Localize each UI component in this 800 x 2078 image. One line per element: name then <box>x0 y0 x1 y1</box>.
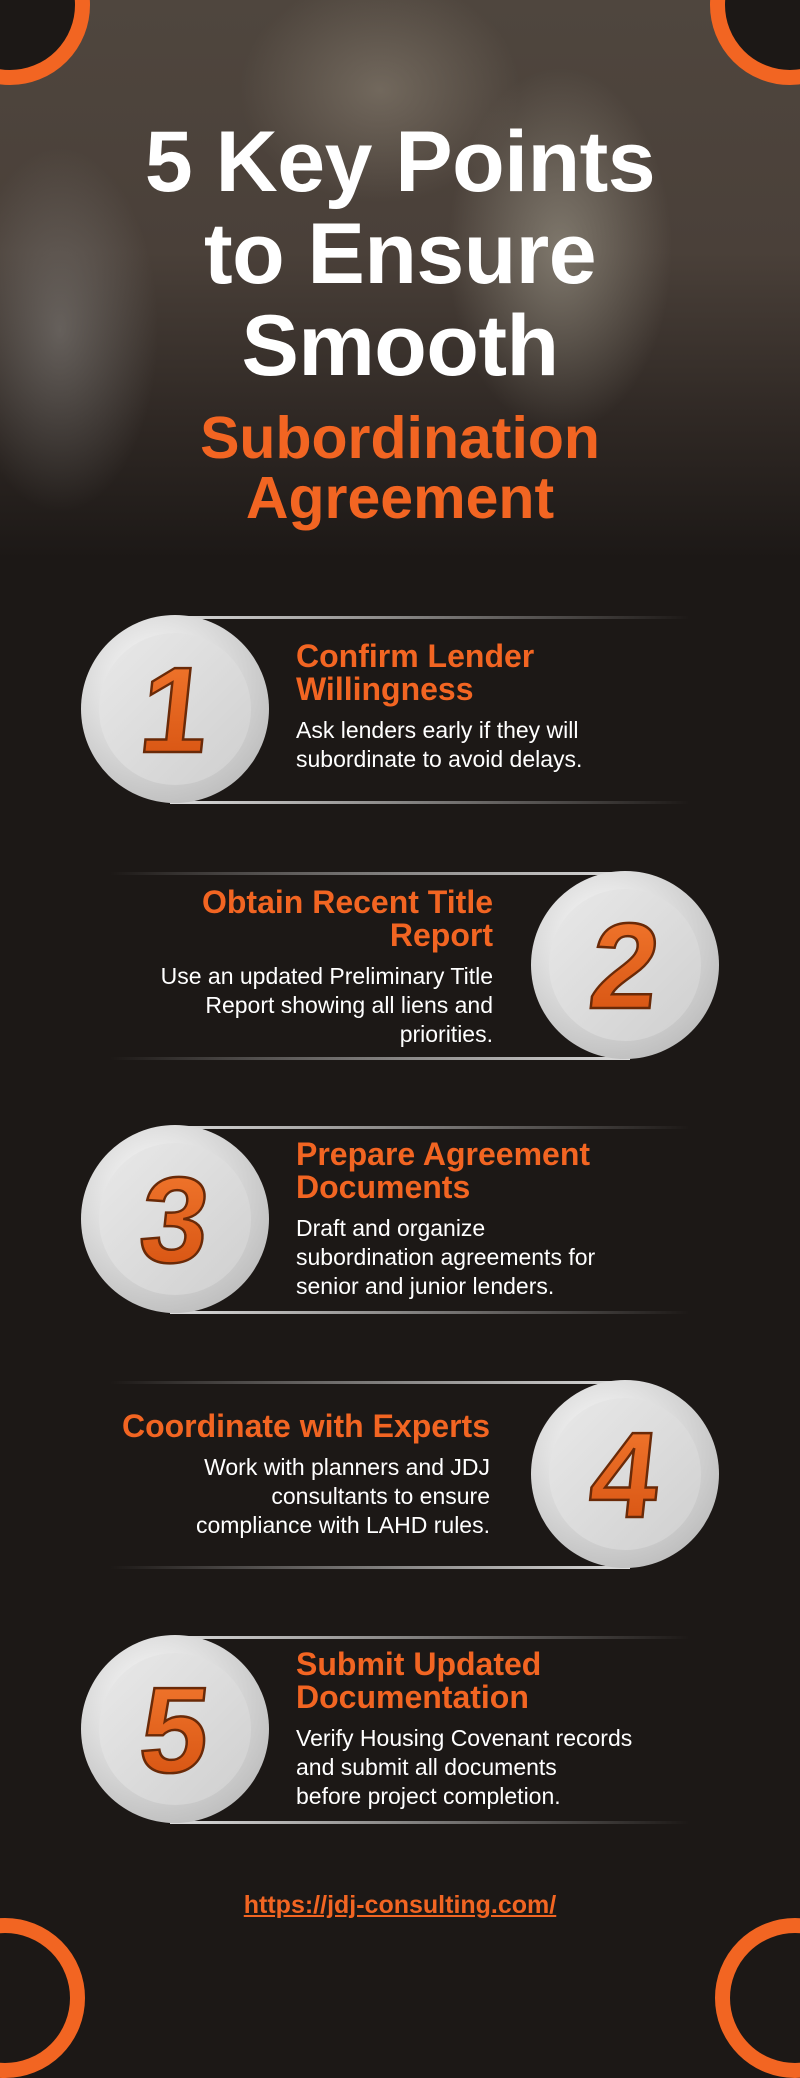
title <box>145 114 655 394</box>
text: step 5: and submit all documents <box>296 1754 557 1780</box>
subtitle <box>200 405 600 531</box>
icon: number 3 circle <box>81 1125 269 1313</box>
text: step 2: Report showing all liens and <box>205 992 493 1018</box>
icon: number 1 circle: 1 <box>134 641 216 778</box>
text: step 5: Verify Housing Covenant records <box>296 1725 632 1751</box>
text: step 5 <box>296 1646 632 1809</box>
text: step 3: Prepare Agreement <box>296 1136 590 1172</box>
text: step 4: Coordinate with Experts <box>122 1408 490 1444</box>
text: step 3: Documents <box>296 1169 470 1205</box>
subtitle: Agreement <box>246 465 554 531</box>
text: step 3: subordination agreements for <box>296 1244 595 1270</box>
text: step 5: Submit Updated <box>296 1646 541 1682</box>
title: Smooth <box>241 298 559 394</box>
icon: number 2 circle: 2 <box>584 897 666 1034</box>
text: step 1: Willingness <box>296 671 474 707</box>
icon: number 5 circle <box>81 1635 269 1823</box>
decor: bottom-left ring <box>0 1918 85 2078</box>
text: step 2: Report <box>390 917 493 953</box>
text: step 1 <box>296 638 582 772</box>
text: step 4: compliance with LAHD rules. <box>196 1512 490 1538</box>
item 1 <box>81 615 669 804</box>
text: step 2: priorities. <box>400 1021 493 1047</box>
title: to Ensure <box>204 206 596 302</box>
text: step 1: Confirm Lender <box>296 638 534 674</box>
text: step 1: subordinate to avoid delays. <box>296 746 582 772</box>
icon: number 1 circle <box>81 615 269 803</box>
text: step 4: Work with planners and JDJ <box>204 1454 490 1480</box>
icon: number 4 circle <box>531 1380 719 1568</box>
icon: number 5 circle: 5 <box>134 1661 216 1798</box>
item 5 <box>81 1635 669 1824</box>
header photo background <box>0 0 800 560</box>
decor: top-right ring <box>710 0 800 85</box>
footer url: https://jdj-consulting.com/ <box>244 1891 556 1919</box>
icon: number 3 circle: 3 <box>134 1151 216 1288</box>
text: step 4 <box>122 1408 490 1538</box>
text: step 2: Obtain Recent Title <box>202 884 493 920</box>
text: step 4: consultants to ensure <box>271 1483 490 1509</box>
item 4 <box>122 1380 719 1569</box>
text: step 5: Documentation <box>296 1679 529 1715</box>
text: step 2 <box>161 884 493 1047</box>
text: step 3: Draft and organize <box>296 1215 485 1241</box>
icon: number 2 circle <box>531 871 719 1059</box>
decor: bottom-right ring <box>715 1918 800 2078</box>
text: step 1: Ask lenders early if they will <box>296 717 578 743</box>
subtitle: Subordination <box>200 405 600 471</box>
text: step 3 <box>296 1136 595 1299</box>
icon: number 4 circle: 4 <box>584 1406 666 1543</box>
decor: top-left ring <box>0 0 90 85</box>
text: step 3: senior and junior lenders. <box>296 1273 554 1299</box>
title: 5 Key Points <box>145 114 655 210</box>
item 2 <box>132 871 719 1060</box>
text: step 2: Use an updated Preliminary Title <box>161 963 493 989</box>
text: step 5: before project completion. <box>296 1783 561 1809</box>
item 3 <box>81 1125 669 1314</box>
